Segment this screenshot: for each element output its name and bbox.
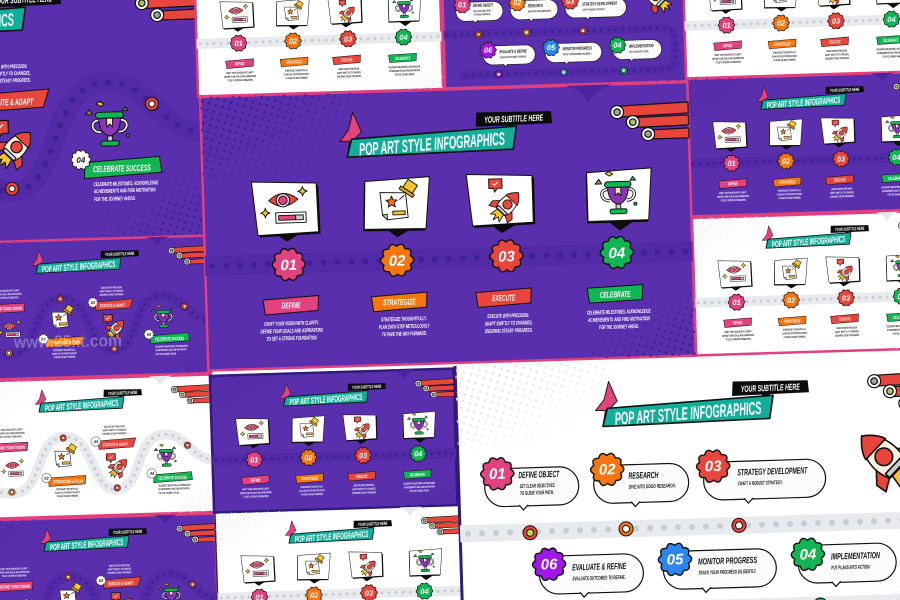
item 3: execute and adapt: [0, 63, 52, 179]
description: ACHIEVEMENTS AND FIND MOTIVATION: [587, 316, 650, 324]
description: PLAN EACH STEP METICULOUSLY: [379, 323, 430, 331]
slide: four steps on white, top right: [682, 0, 900, 78]
badge numbers: 02: [599, 461, 616, 479]
title banner: POP ART STYLE INFOGRAPHICS: [358, 129, 506, 160]
callout 01: define object: TO GUIDE YOUR PATH.: [520, 490, 554, 497]
speech bubble roadmap: [457, 416, 900, 600]
slide header and decoration: [200, 82, 696, 370]
label: execute: EXECUTE: [492, 292, 516, 303]
step 2: strategize: [362, 177, 434, 339]
slide: speech bubble roadmap on white, large bottom right: [455, 351, 900, 600]
slide: wave roadmap on white, left: [0, 375, 214, 519]
label: strategize: STRATEGIZE: [383, 296, 416, 307]
description: CELEBRATE MILESTONES, ACKNOWLEDGE: [587, 309, 651, 317]
callout 05: monitor progress: TRACK YOUR PROGRESS DILIGENTLY.: [698, 569, 757, 577]
item 4: celebrate success: 04: [76, 156, 86, 165]
description: [260, 320, 324, 343]
badge 04: [600, 236, 634, 269]
steps timeline: [203, 167, 695, 345]
description: DEFINE YOUR GOALS AND ASPIRATIONS: [260, 328, 323, 336]
callout 01: define object: [480, 455, 579, 511]
watermark: www.25xt.com: [13, 331, 122, 352]
description: [484, 313, 533, 335]
step 3: execute: [466, 172, 539, 336]
step 1: define: [251, 180, 324, 343]
item 4: celebrate success: ACHIEVEMENTS AND FIND MOTIVATION: [93, 187, 156, 195]
callout 03: strategy development: [696, 447, 826, 505]
lightning bolt: [339, 112, 362, 157]
slide: four steps on white, right: [692, 211, 900, 355]
slide: four steps on purple, right: [687, 72, 900, 216]
slide: four steps on white, top centre: [194, 0, 443, 96]
callout 04: implementation: PUT PLANS INTO ACTION.: [831, 564, 871, 572]
road markers: [523, 516, 828, 600]
label: execute: [476, 288, 532, 308]
card with eye icon: [251, 180, 321, 243]
item 4: celebrate success: CELEBRATE SUCCESS: [93, 163, 151, 174]
badge 02: [380, 244, 414, 277]
description: ADAPT SWIFTLY TO CHANGES,: [484, 320, 533, 328]
callout 04: implementation: [791, 536, 897, 588]
title banner: [346, 126, 517, 160]
callout 06: evaluate and refine: EVALUATE OUTCOMES TO REFINE.: [572, 575, 626, 583]
winding road: [0, 78, 203, 202]
top notch: [566, 84, 612, 104]
slide: celebrate success wave, large crop top left: [0, 0, 205, 251]
road with a U-turn: [460, 520, 900, 600]
badge 01: 01: [280, 257, 297, 274]
slide: speech bubble roadmap on purple, top centre: [441, 0, 690, 88]
item 4: celebrate success: FOR THE JOURNEY AHEAD.: [94, 196, 136, 203]
description: CRAFT YOUR VISION WITH CLARITY.: [264, 320, 319, 328]
slide: wave roadmap on purple, left: [0, 236, 211, 380]
slide frame: [200, 82, 696, 370]
label: celebrate: CELEBRATE: [600, 289, 631, 300]
description: TO SET A STRONG FOUNDATION.: [267, 335, 318, 343]
slide: four steps on purple, lower centre: [210, 369, 458, 513]
badge numbers: 04: [799, 546, 817, 564]
red bars with rings: [610, 102, 689, 142]
slide: wave roadmap on purple, bottom left: [0, 514, 219, 600]
label: define: [263, 295, 319, 315]
label: define: DEFINE: [281, 300, 301, 311]
callout 03: strategy development: CRAFT A ROBUST STRATEGY.: [738, 480, 783, 487]
callout 06: evaluate and refine: EVALUATE & REFINE: [572, 561, 627, 573]
badge numbers: 06: [541, 556, 558, 573]
label: celebrate: [587, 285, 643, 303]
description: STRATEGIZE THOUGHTFULLY.: [381, 316, 427, 323]
badge numbers: [489, 455, 817, 575]
badge numbers: 03: [705, 458, 722, 475]
callout 02: research: RESEARCH: [628, 470, 659, 481]
callout 05: monitor progress: MONITOR PROGRESS: [698, 555, 757, 567]
slide: main four steps on purple, centre: [200, 82, 696, 370]
callout 01: define object: SET CLEAR OBJECTIVES: [520, 483, 555, 490]
badge numbers: 01: [489, 466, 506, 483]
step 4: celebrate: [582, 168, 656, 332]
callout 02: research: [590, 451, 689, 508]
subtitle tag: [475, 110, 552, 132]
callout 01: define object: DEFINE OBJECT: [518, 469, 560, 480]
badge 03: [489, 239, 524, 272]
timeline band: [205, 241, 693, 276]
description: [378, 316, 431, 338]
slide: four steps on white, bottom centre: [215, 506, 464, 600]
card with trophy icon: [585, 168, 653, 231]
callout 06: evaluate and refine: [532, 545, 644, 599]
road markers: [0, 75, 161, 204]
description: FOR THE JOURNEY AHEAD.: [599, 324, 639, 331]
card with note icon: [362, 177, 431, 238]
callout 05: monitor progress: [658, 540, 777, 594]
badge 03: 03: [498, 248, 516, 266]
badge 01: [272, 248, 306, 281]
item 4: celebrate success: [69, 100, 163, 204]
wave chart: roadmap with four stops: [0, 59, 204, 215]
badge 02: 02: [389, 252, 406, 270]
description: ENSURING STEADY PROGRESS.: [485, 328, 533, 335]
description: [587, 309, 651, 332]
callout 02: research: DIVE INTO GOOD RESEARCH.: [629, 483, 676, 491]
description: TO PAVE THE WAY FORWARD.: [382, 331, 427, 338]
rocket: [844, 417, 900, 503]
label: strategize: [371, 292, 428, 312]
item 4: celebrate success: CELEBRATE MILESTONES, ACKNOWLEDGE: [94, 180, 159, 188]
subtitle tag: YOUR SUBTITLE HERE: [484, 113, 544, 125]
card with rocket icon: [466, 172, 536, 234]
badge numbers: 05: [666, 551, 684, 569]
halftone corners: [200, 82, 696, 370]
description: EXECUTE WITH PRECISION.: [487, 313, 530, 320]
badge 04: 04: [608, 245, 626, 262]
callout 03: strategy development: STRATEGY DEVELOPMENT: [737, 465, 808, 477]
